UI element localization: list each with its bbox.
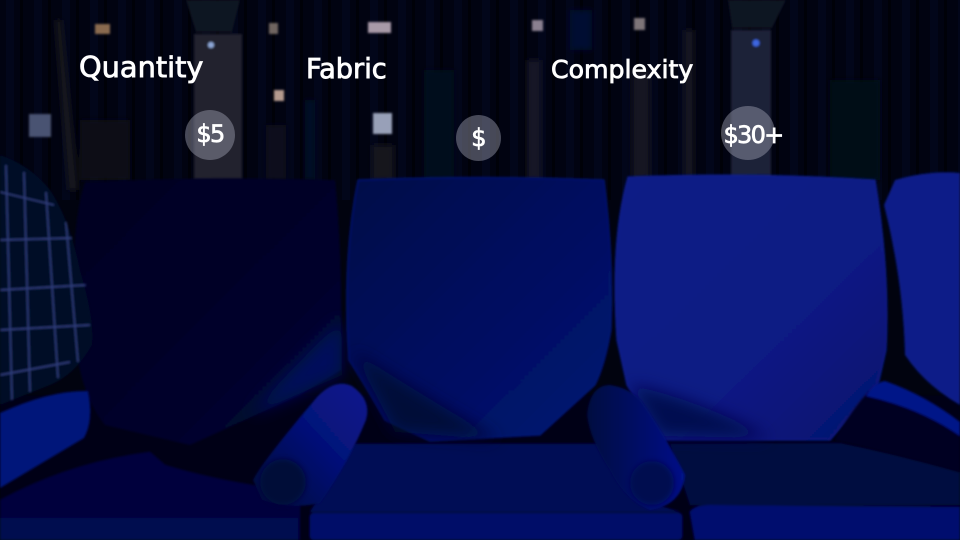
small wall details [29, 18, 645, 137]
price bubble: $5 [185, 110, 235, 160]
price label: $30+: $30+ [723, 121, 783, 149]
pillars [186, 0, 786, 180]
heading: Fabric: Fabric [306, 54, 387, 85]
middle seat front [310, 513, 682, 540]
cushion left [74, 178, 341, 445]
cushion middle shadow [352, 350, 500, 440]
cushion left lit corner [250, 320, 342, 415]
price bubble: $ [456, 115, 501, 161]
heading: Quantity: Quantity [79, 50, 203, 84]
sofa base and seats [0, 395, 960, 540]
curtain backdrop [0, 0, 960, 200]
rolled arms [0, 381, 960, 510]
right seat [670, 443, 960, 505]
man's plaid shirt at left edge [0, 155, 92, 405]
arm: middle left [253, 384, 367, 506]
heading: Complexity: Complexity [551, 55, 693, 84]
cushion middle [347, 178, 612, 441]
arm: middle right [587, 385, 685, 510]
cushion far right [884, 172, 960, 405]
arm end caps [260, 459, 674, 505]
left seat [0, 452, 300, 540]
cushion right [615, 175, 887, 440]
price label: $5: $5 [196, 120, 224, 148]
price label: $: $ [471, 124, 485, 152]
middle seat [310, 444, 680, 512]
arm: far right [835, 382, 960, 472]
right seat front [690, 505, 960, 540]
cushion right shadow [630, 385, 770, 438]
price bubble: $30+ [721, 106, 775, 160]
left pillow [0, 391, 90, 488]
